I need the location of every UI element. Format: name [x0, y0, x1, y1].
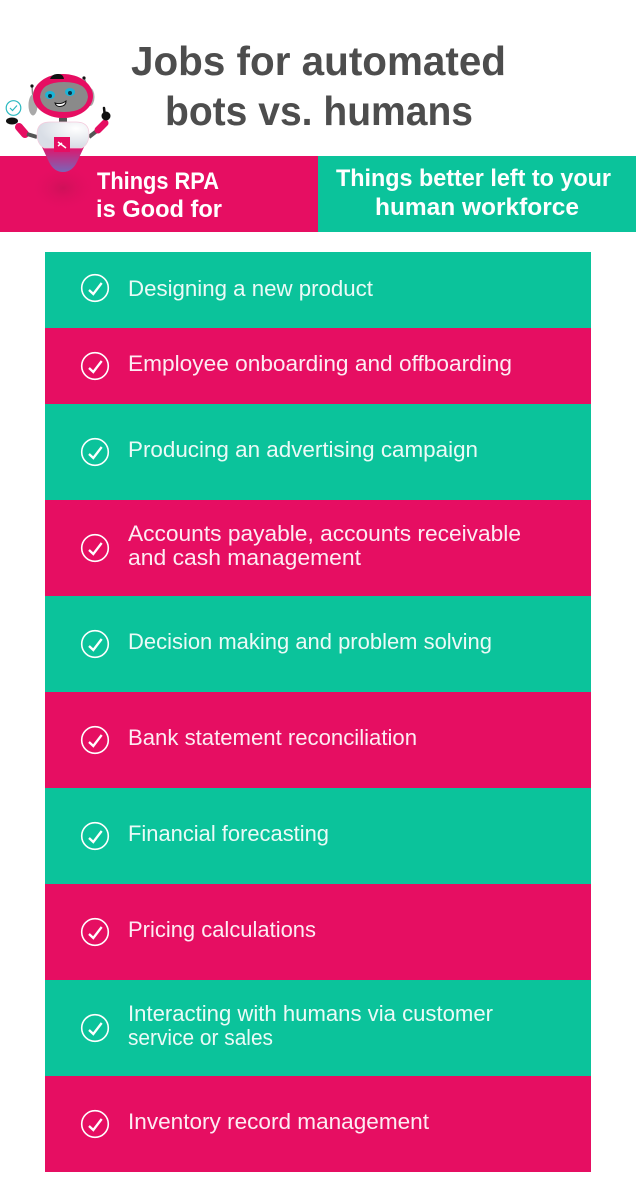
row: Employee onboarding and offboarding: Employee onboarding and offboarding: [128, 351, 512, 376]
title: bots vs. humans: [165, 88, 473, 134]
row: Interacting with humans: [45, 980, 591, 1076]
row: Producing an advertising campaign: [45, 404, 591, 500]
row: Decision making and problem solving: Decision making and problem solving: [128, 629, 492, 654]
row: Financial forecasting: Financial forecasting: [128, 821, 329, 846]
row: Bank statement reconciliation: Bank statement reconciliation: [128, 725, 417, 750]
row: Pricing calculations: [45, 884, 591, 980]
row: Designing a new product: Designing a new product: [128, 276, 373, 301]
row: Producing an advertising campaign: Producing an advertising campaign: [128, 437, 478, 462]
row: Accounts payable: Accounts payable, accounts receivable: [128, 521, 521, 546]
row: Inventory record management: Inventory record management: [128, 1109, 429, 1134]
panel: human header: [318, 156, 636, 232]
row: Inventory record management: [45, 1076, 591, 1172]
row: Financial forecasting: [45, 788, 591, 884]
title: Jobs for automated: [131, 38, 506, 84]
panel: human header: Things better left to your: [336, 165, 611, 192]
panel: RPA header: Things RPA: [97, 168, 219, 195]
row: Accounts payable: and cash management: [128, 545, 361, 570]
title: [131, 38, 506, 134]
row: Interacting with humans: service or sales: [128, 1025, 273, 1050]
row: Pricing calculations: Pricing calculations: [128, 917, 316, 942]
row: Bank statement reconciliation: [45, 692, 591, 788]
panel: human header: human workforce: [375, 194, 579, 221]
icon: robot mascot: [6, 74, 110, 172]
panel: RPA header: [0, 156, 318, 232]
row: Accounts payable: [45, 500, 591, 596]
row: Decision making and problem solving: [45, 596, 591, 692]
row: Interacting with humans: Interacting with humans via customer: [128, 1001, 493, 1026]
panel: RPA header: is Good for: [96, 196, 222, 223]
row: Designing a new product: [45, 252, 591, 328]
row: Employee onboarding and offboarding: [45, 328, 591, 404]
